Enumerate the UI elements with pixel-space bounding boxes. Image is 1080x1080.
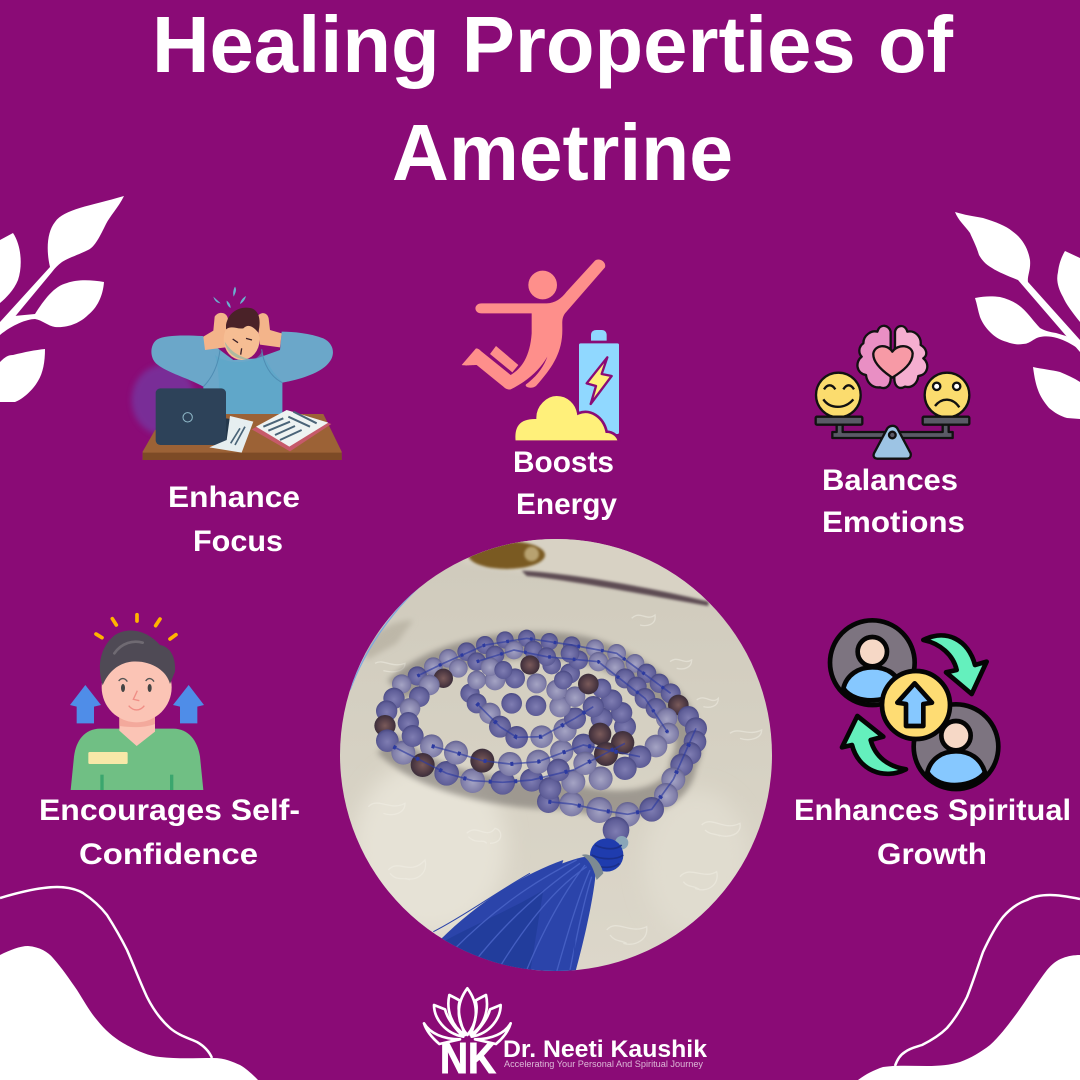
logo: Dr. Neeti Kaushik lotus	[424, 988, 708, 1080]
label: Enhance Focus: Focus	[193, 525, 283, 558]
icon: jumping figure with battery and cloud	[462, 260, 619, 442]
label: Enhance Focus: Enhance	[168, 481, 300, 514]
logo: Dr. Neeti Kaushik lotus: Dr. Neeti Kaushik	[503, 1036, 708, 1063]
fabric om pattern	[368, 615, 762, 944]
label: Enhances Spiritual Growth: Growth	[877, 838, 987, 871]
title: Healing Properties of	[152, 0, 953, 89]
photo edge tint	[350, 586, 420, 690]
photo: ametrine mala beads with blue tassel	[340, 530, 772, 973]
label: Enhance Focus	[168, 481, 300, 558]
bead shadow	[387, 645, 688, 804]
bead thread and knots	[393, 638, 696, 814]
label: Encourages Self-Confidence: Confidence	[79, 838, 258, 871]
label: Balances Emotions: Emotions	[822, 506, 965, 539]
icon: confident person with up arrows	[70, 615, 204, 790]
decoration: left leaves	[0, 196, 124, 402]
icon: people exchange with growth arrow	[830, 620, 998, 789]
label: Enhances Spiritual Growth	[794, 794, 1071, 871]
icon: brain, heart and balance scale	[816, 326, 969, 459]
label: Balances Emotions	[822, 464, 965, 539]
guru bead	[603, 817, 629, 843]
decoration: bottom left wave	[0, 887, 258, 1080]
title	[152, 0, 953, 197]
label: Encourages Self-Confidence: Encourages Self-	[39, 794, 300, 827]
icon: stressed person at desk	[132, 287, 342, 460]
label: Encourages Self-Confidence	[39, 794, 300, 871]
lotus petals	[424, 988, 511, 1044]
decoration: bottom right wave	[858, 895, 1080, 1080]
outer bead strand	[374, 630, 707, 827]
label: Balances Emotions: Balances	[822, 464, 958, 497]
inner bead strands	[398, 641, 679, 794]
title: Ametrine	[392, 108, 733, 197]
decoration: right leaves	[955, 212, 1080, 419]
label: Boosts Energy	[513, 446, 617, 521]
label: Boosts Energy: Boosts	[513, 446, 614, 479]
logo: Dr. Neeti Kaushik lotus: Accelerating Your Personal And Spiritual Journey	[504, 1059, 704, 1069]
label: Boosts Energy: Energy	[516, 488, 617, 521]
tassel	[442, 857, 595, 973]
label: Enhances Spiritual Growth: Enhances Spiritual	[794, 794, 1071, 827]
